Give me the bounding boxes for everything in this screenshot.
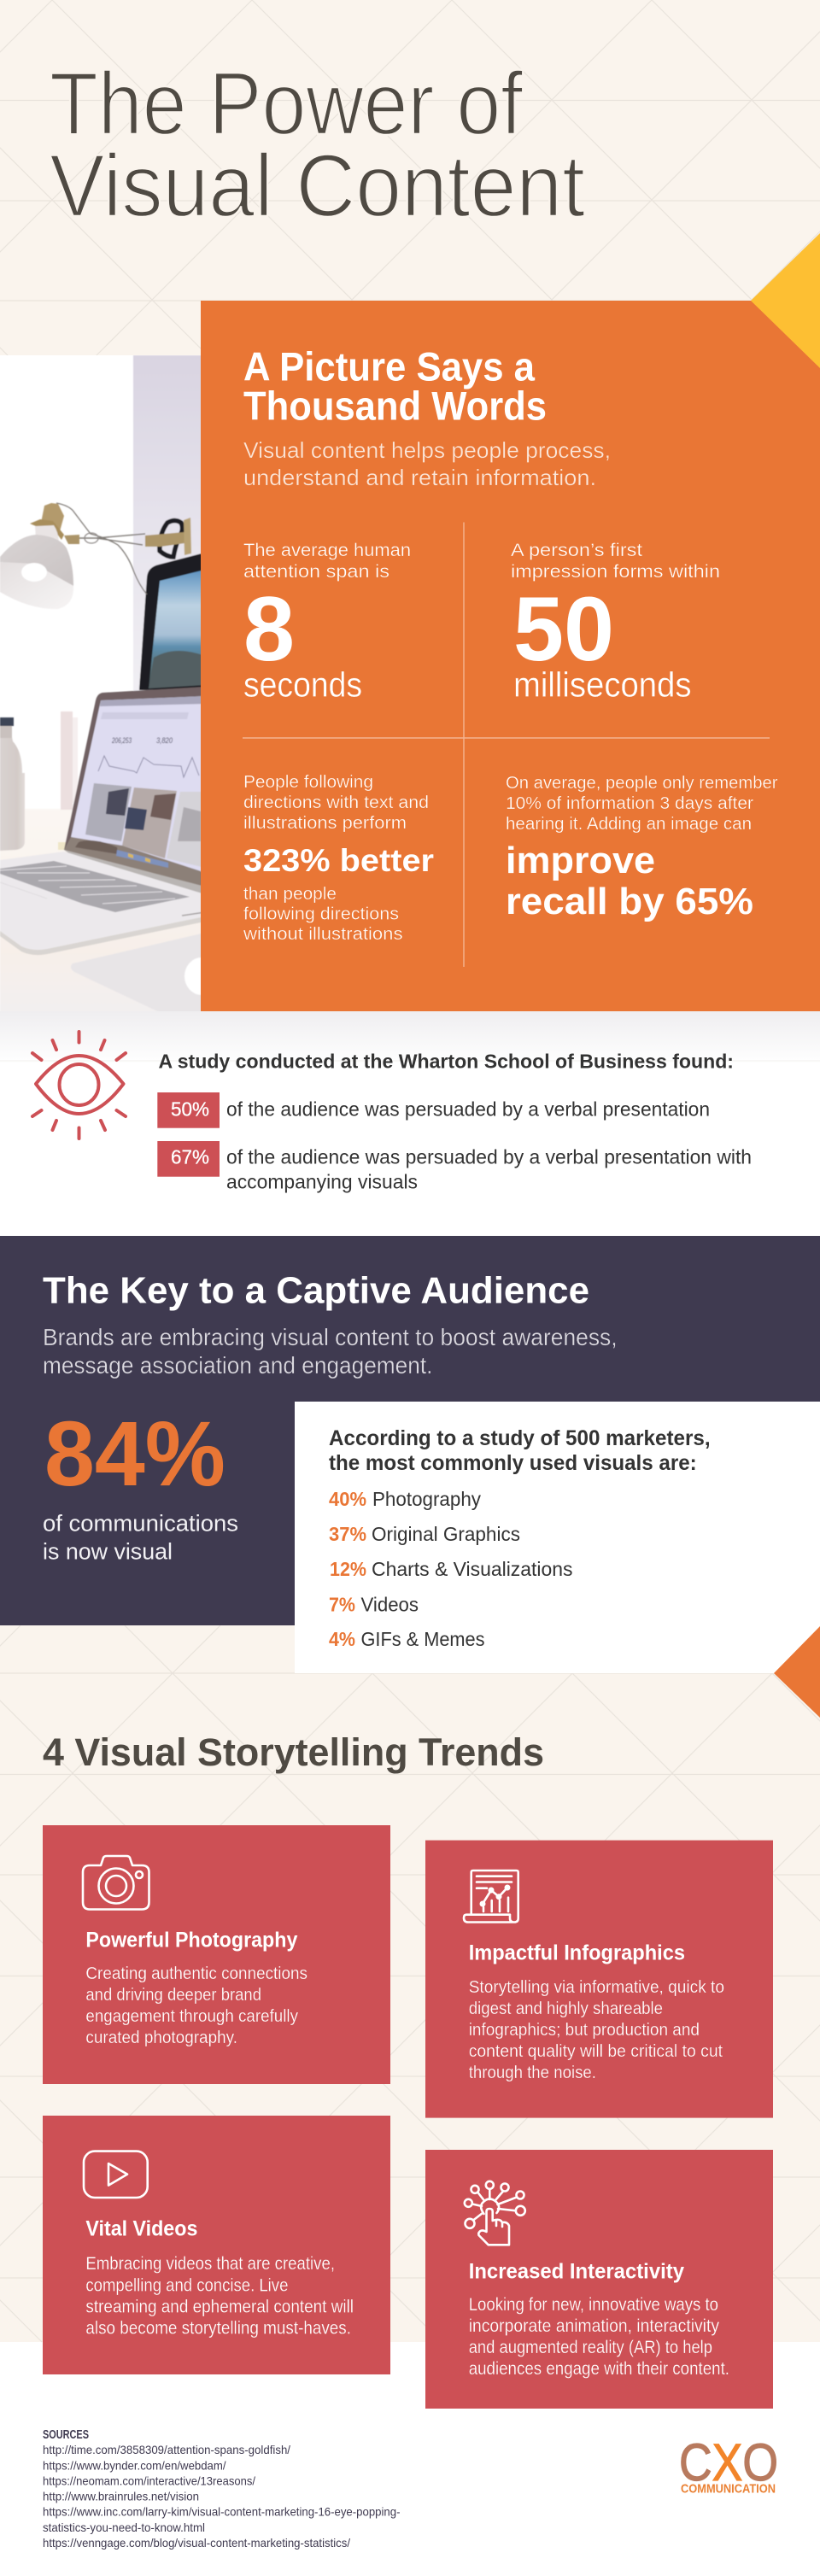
card: powerful photography xyxy=(43,1825,390,2084)
icon: camera xyxy=(83,1856,149,1910)
card text: also become storytelling must-haves. xyxy=(85,2318,351,2338)
lower cream background with triangle lattice xyxy=(0,1625,820,2342)
title xyxy=(50,55,585,236)
stat: 50 milliseconds: impression forms within xyxy=(511,561,720,582)
card text: and driving deeper brand xyxy=(85,1985,261,2005)
card text: infographics; but production and xyxy=(469,2020,700,2040)
list item: gifs: 4% xyxy=(329,1628,355,1650)
stat: 323% better: 323% better xyxy=(243,843,434,878)
stat: 323% better: without illustrations xyxy=(243,924,403,944)
panel: most commonly used visuals xyxy=(295,1402,820,1673)
list item: charts: 12% xyxy=(330,1558,366,1580)
photo: desk with lamp, monitor and laptop: 3,820 xyxy=(156,736,173,746)
list item: original graphics: Original Graphics xyxy=(372,1523,520,1545)
stat: 323% better: than people xyxy=(243,884,337,904)
soft desk shadow fading into white xyxy=(0,1011,820,1064)
trends heading: 4 Visual Storytelling Trends xyxy=(43,1730,544,1774)
logo: CXO Communication: CXO xyxy=(679,2433,778,2491)
stat row: 67%: of the audience was persuaded by a verbal presentation with xyxy=(226,1145,752,1168)
big stat: 84%: of communications xyxy=(43,1510,238,1536)
section heading: The Key to a Captive Audience xyxy=(43,1270,589,1312)
card title: Impactful Infographics xyxy=(469,1941,685,1965)
stat row: 50% xyxy=(157,1092,710,1128)
list item: original graphics: 37% xyxy=(329,1523,366,1545)
card text xyxy=(469,1977,724,2082)
stat: 323% better: illustrations perform xyxy=(243,813,407,833)
sources: SOURCES xyxy=(43,2428,89,2442)
card title: Vital Videos xyxy=(85,2216,197,2240)
list item: videos: 7% xyxy=(329,1593,355,1615)
list heading xyxy=(329,1426,711,1475)
card text: Looking for new, innovative ways to xyxy=(469,2295,718,2315)
stat: 50 milliseconds: A person’s first xyxy=(511,540,642,560)
accent: yellow diamond xyxy=(751,233,820,368)
list heading: the most commonly used visuals are: xyxy=(329,1451,697,1475)
stat: 323% better: People following xyxy=(243,772,373,792)
card text: through the noise. xyxy=(469,2063,596,2082)
stat: improve recall by 65%: improve xyxy=(506,840,655,881)
sources: http://www.brainrules.net/vision xyxy=(43,2489,199,2503)
icon: touch network xyxy=(465,2181,525,2245)
stat: improve recall by 65%: recall by 65% xyxy=(506,881,753,922)
panel intro text: Visual content helps people process, xyxy=(243,437,611,463)
card text: streaming and ephemeral content will xyxy=(85,2297,354,2316)
photo: desk with lamp, monitor and laptop: 206,253 xyxy=(111,736,132,746)
section intro: message association and engagement. xyxy=(43,1352,432,1379)
faint divider in white band xyxy=(0,1060,820,1062)
icon: eye xyxy=(32,1032,126,1139)
card: increased interactivity xyxy=(425,2150,773,2409)
card text: compelling and concise. Live xyxy=(85,2275,288,2295)
section intro: Brands are embracing visual content to boost awareness, xyxy=(43,1324,618,1350)
card text: incorporate animation, interactivity xyxy=(469,2316,719,2336)
stat row: 67% xyxy=(157,1141,752,1193)
section intro xyxy=(43,1324,618,1379)
stat: improve recall by 65%: On average, people only remember xyxy=(506,773,778,793)
sources: statistics-you-need-to-know.html xyxy=(43,2520,205,2534)
card text: audiences engage with their content. xyxy=(469,2359,729,2379)
list item: charts: Charts & Visualizations xyxy=(372,1558,572,1580)
card text xyxy=(469,2295,729,2379)
photo: desk with lamp, monitor and laptop xyxy=(0,355,219,1016)
card text: Embracing videos that are creative, xyxy=(85,2254,335,2274)
list item: photography: Photography xyxy=(372,1488,481,1510)
stat: 323% better xyxy=(243,772,434,944)
card text: content quality will be critical to cut xyxy=(469,2041,723,2061)
icon: report scroll xyxy=(464,1871,518,1922)
stat: 8 seconds xyxy=(243,540,411,704)
stat row: 50%: of the audience was persuaded by a verbal presentation xyxy=(226,1098,710,1121)
sources: https://www.bynder.com/en/webdam/ xyxy=(43,2458,226,2472)
list item: gifs: GIFs & Memes xyxy=(360,1628,485,1650)
panel heading xyxy=(243,343,547,429)
stat: 8 seconds: attention span is xyxy=(243,561,390,582)
stat: 50 milliseconds: 50 xyxy=(513,577,614,680)
card: impactful infographics xyxy=(425,1841,773,2118)
sources: http://time.com/3858309/attention-spans-goldfish/ xyxy=(43,2443,290,2456)
card text: and augmented reality (AR) to help xyxy=(469,2338,712,2357)
sources: https://www.inc.com/larry-kim/visual-content-marketing-16-eye-popping- xyxy=(43,2505,401,2519)
list item: videos: Videos xyxy=(360,1593,419,1615)
card text: Storytelling via informative, quick to xyxy=(469,1977,724,1997)
list item: photography: 40% xyxy=(329,1488,366,1510)
sources xyxy=(43,2428,401,2550)
card text: engagement through carefully xyxy=(85,2006,299,2026)
card: vital videos xyxy=(43,2116,390,2374)
sources: https://venngage.com/blog/visual-content-marketing-statistics/ xyxy=(43,2536,350,2550)
card text: curated photography. xyxy=(85,2028,237,2047)
big stat: 84% xyxy=(43,1402,238,1565)
panel: the key to a captive audience xyxy=(0,1236,820,1673)
stat row: 67%: 67% xyxy=(171,1145,209,1168)
card title: Powerful Photography xyxy=(85,1929,297,1952)
stat: 8 seconds: seconds xyxy=(243,664,362,704)
stat: 323% better: following directions xyxy=(243,904,399,924)
card text: Creating authentic connections xyxy=(85,1964,308,1983)
stat: improve recall by 65% xyxy=(506,773,778,922)
panel intro text: understand and retain information. xyxy=(243,465,596,490)
big stat: 84%: is now visual xyxy=(43,1539,173,1565)
panel heading: Thousand Words xyxy=(243,383,547,429)
accent: orange diamond xyxy=(774,1626,820,1718)
stat row: 67%: accompanying visuals xyxy=(226,1171,418,1193)
stat: improve recall by 65%: 10% of information 3 days after xyxy=(506,793,753,813)
stat: 8 seconds: 8 xyxy=(243,577,295,680)
stat: 8 seconds: The average human xyxy=(243,540,411,560)
title: The Power of xyxy=(50,55,524,154)
big stat: 84%: 84% xyxy=(44,1402,226,1505)
list item: videos xyxy=(329,1593,419,1615)
stat: 50 milliseconds xyxy=(511,540,720,704)
list heading: According to a study of 500 marketers, xyxy=(329,1426,711,1450)
sources: https://neomam.com/interactive/13reasons/ xyxy=(43,2474,255,2487)
logo: CXO Communication: COMMUNICATION xyxy=(681,2482,776,2497)
card text: digest and highly shareable xyxy=(469,1999,663,2018)
study heading: A study conducted at the Wharton School of Business found: xyxy=(159,1051,734,1073)
top cream background with triangle lattice xyxy=(0,0,820,355)
stat: 323% better: directions with text and xyxy=(243,793,429,812)
icon: play button xyxy=(84,2152,148,2198)
wharton study block xyxy=(157,1051,752,1193)
card text xyxy=(85,1964,308,2047)
panel intro text xyxy=(243,437,611,490)
card text xyxy=(85,2254,354,2338)
panel heading: A Picture Says a xyxy=(243,343,536,389)
title: Visual Content xyxy=(50,137,585,236)
panel: a picture says a thousand words xyxy=(201,301,820,1011)
stat: improve recall by 65%: hearing it. Adding an image can xyxy=(506,814,752,834)
card title: Increased Interactivity xyxy=(469,2259,684,2283)
stat row: 50%: 50% xyxy=(171,1098,209,1121)
stat: 50 milliseconds: milliseconds xyxy=(513,664,692,704)
